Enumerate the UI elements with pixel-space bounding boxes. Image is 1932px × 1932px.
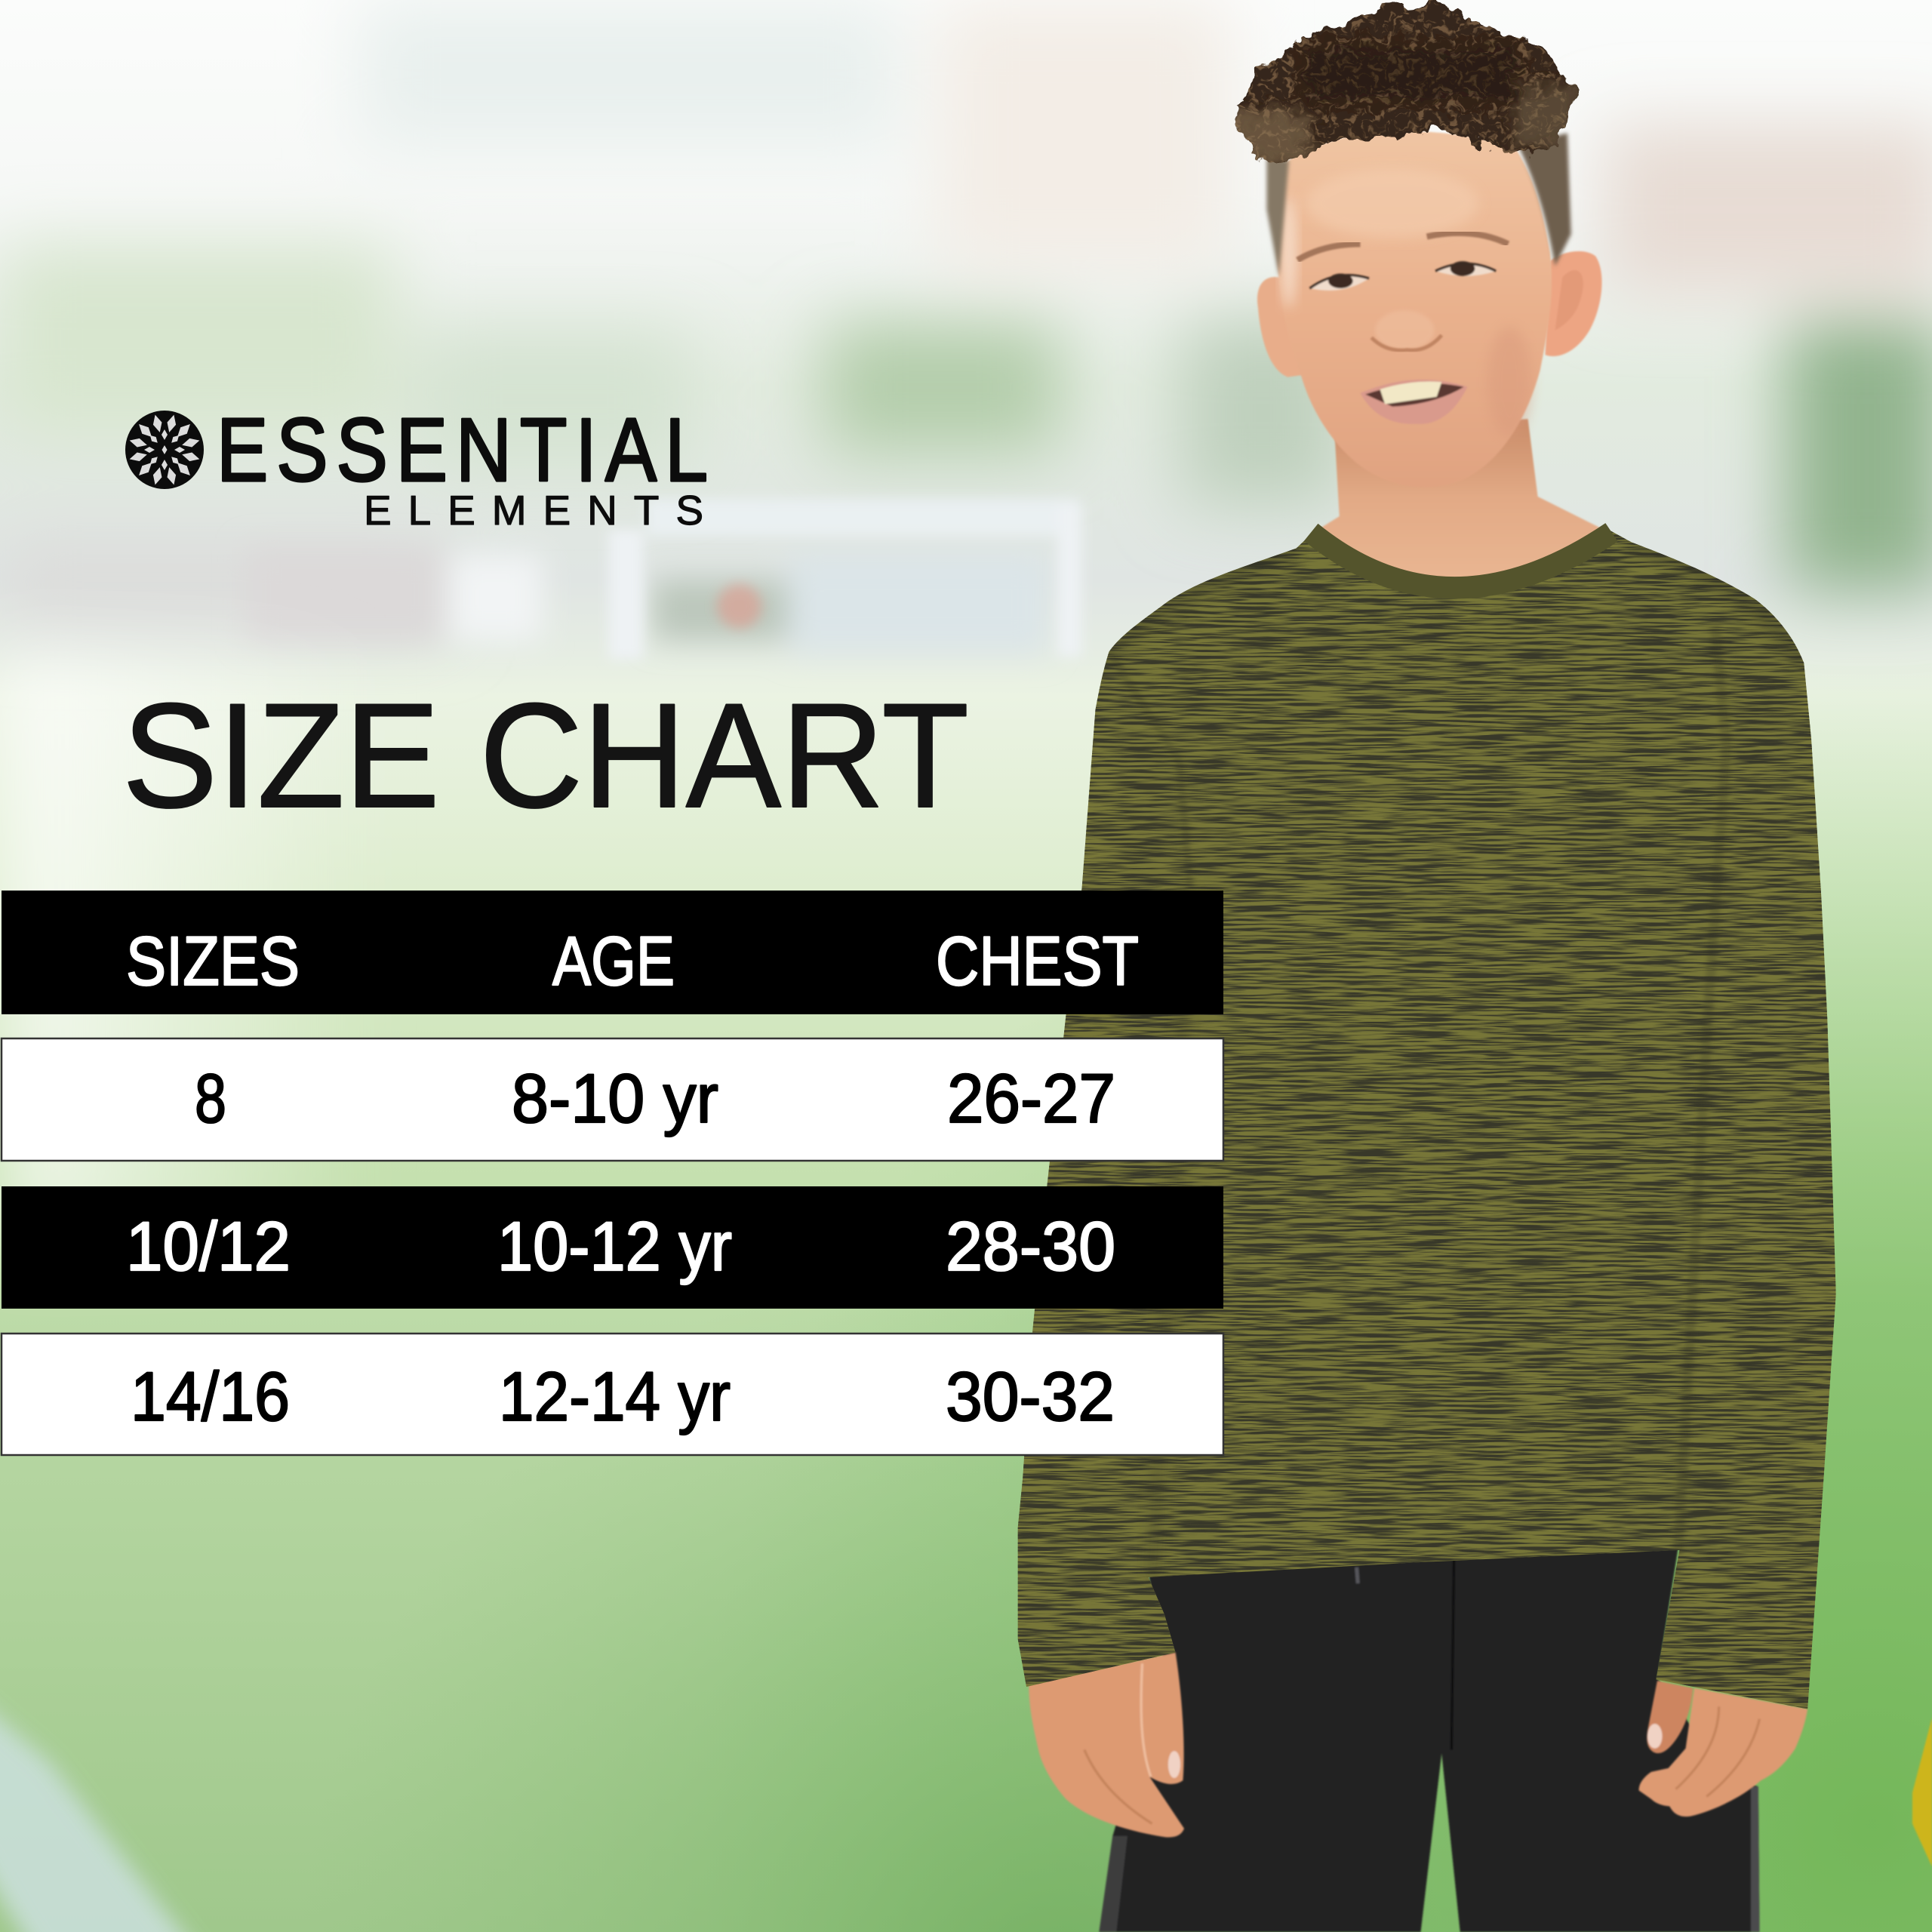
row: size 10/12 [2, 1186, 1223, 1309]
row: size 10/12: 10/12 [126, 1208, 291, 1285]
curly hair [1232, 0, 1583, 173]
logo emblem [125, 411, 204, 489]
shirt [1017, 523, 1836, 1709]
photo: boy wearing olive long-sleeve shirt [986, 0, 1932, 1932]
row: size 8: 8 [195, 1060, 226, 1137]
header row [2, 891, 1223, 1014]
logo: Essential Elements [125, 400, 708, 534]
row: size 10/12: 28-30 [946, 1208, 1115, 1285]
header row: CHEST [936, 923, 1139, 1000]
header row: SIZES [126, 923, 300, 1000]
neck [1313, 419, 1609, 594]
row: size 8: 26-27 [947, 1060, 1115, 1137]
size table [2, 891, 1223, 1455]
row: size 14/16: 12-14 yr [499, 1358, 731, 1435]
row: size 8 [2, 1038, 1223, 1161]
title: SIZE CHART [122, 672, 969, 838]
ears [1257, 251, 1602, 377]
eyes [1310, 261, 1496, 291]
mouth [1361, 380, 1468, 424]
row: size 10/12: 10-12 yr [497, 1208, 732, 1285]
nose [1371, 310, 1441, 350]
row: size 14/16: 30-32 [946, 1358, 1115, 1435]
left hand [1029, 1652, 1184, 1838]
row: size 14/16: 14/16 [131, 1358, 290, 1435]
row: size 14/16 [2, 1334, 1223, 1455]
yellow object at edge [1912, 1718, 1932, 1867]
collar [1311, 532, 1612, 588]
logo wordmark: ESSENTIAL [217, 400, 708, 500]
header row: AGE [552, 923, 675, 1000]
row: size 8: 8-10 yr [512, 1060, 718, 1137]
head [1232, 0, 1602, 487]
shaved side hair [1266, 133, 1571, 277]
right hand [1638, 1681, 1807, 1817]
pants [1099, 1548, 1759, 1932]
eyebrows [1297, 244, 1361, 260]
face [1276, 131, 1552, 487]
logo subline: ELEMENTS [364, 487, 703, 534]
